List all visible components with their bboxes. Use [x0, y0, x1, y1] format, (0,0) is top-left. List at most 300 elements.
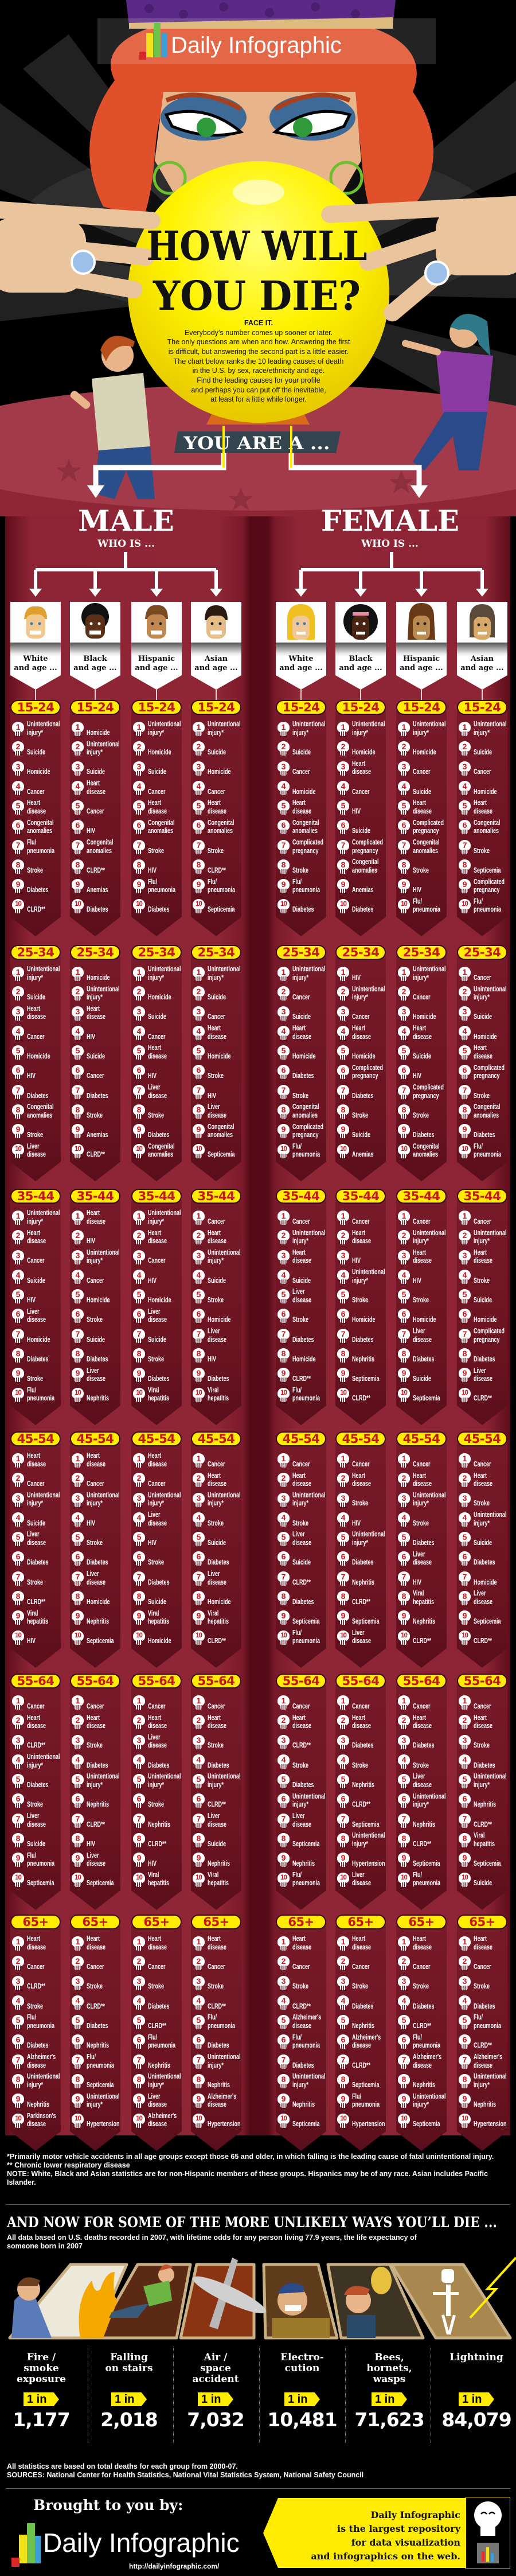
column: male asian 25-34 [191, 945, 241, 1181]
column: male hispanic 15-24: 2 [137, 742, 141, 751]
column: male white 55-64: 1 [16, 1696, 20, 1705]
column: female black 45-54: 1 [341, 1454, 345, 1463]
column: male black 25-34: 8 [76, 1105, 80, 1114]
column: male black 55-64: CLRD** [87, 1820, 105, 1828]
column: male hispanic 35-44: 5 [137, 1290, 141, 1299]
column: female white 15-24: pneumonia [292, 886, 320, 894]
column: male white 65+: 7 [16, 2055, 20, 2064]
column: female asian 55-64: Cancer [474, 1702, 491, 1710]
column: male asian 65+: Flu/ [208, 2013, 217, 2021]
card: male white [10, 602, 61, 690]
column: female hispanic 65+ [396, 1915, 447, 2151]
column: male asian 55-64: disease [208, 1820, 226, 1828]
column: female asian 25-34: 25-34 [464, 945, 501, 959]
stat: bees: 71,623 [354, 2408, 424, 2431]
column: female asian 55-64: 8 [463, 1834, 467, 1843]
column: male asian 25-34: 1 [197, 967, 201, 976]
column: male white 55-64: disease [27, 1820, 46, 1828]
column: female asian 15-24: pregnancy [474, 886, 500, 894]
column: female black 35-44: Diabetes [352, 1336, 374, 1344]
column: male white 65+: Nephritis [27, 2100, 49, 2108]
column: female asian 45-54 [457, 1431, 507, 1668]
column: male black 45-54: disease [87, 1460, 105, 1468]
column: male hispanic 25-34: Stroke [148, 1111, 164, 1119]
column: female hispanic 55-64: 8 [402, 1834, 406, 1843]
column: female asian 15-24: Unintentional [474, 720, 506, 728]
column: male hispanic 55-64: Stroke [148, 1800, 164, 1808]
column: female white 45-54: injury* [292, 1499, 308, 1507]
logo: Daily Infographic [171, 33, 342, 58]
column: male black 65+: Nephritis [87, 2041, 109, 2049]
column: male asian 45-54: Homicide [208, 1598, 231, 1606]
column: female black 45-54: Stroke [352, 1499, 368, 1507]
column: female black 35-44: 35-44 [342, 1189, 379, 1203]
column: female asian 55-64: Viral [474, 1831, 484, 1839]
column: male asian 55-64: Stroke [208, 1741, 224, 1749]
column: female white 65+: 7 [282, 2055, 286, 2064]
column: male black 65+: 8 [76, 2075, 80, 2084]
column: male black 65+: 1 [76, 1937, 80, 1946]
column: female white 25-34: Flu/ [292, 1142, 302, 1150]
column: male white 55-64: injury* [27, 1761, 43, 1769]
column: female asian 25-34: 1 [463, 967, 467, 976]
column: female hispanic 15-24: injury* [413, 729, 429, 737]
column: female asian 35-44: 2 [463, 1231, 467, 1240]
column: female hispanic 35-44: 5 [402, 1290, 406, 1299]
column: female hispanic 25-34 [396, 945, 447, 1181]
column: female hispanic 25-34: 6 [402, 1065, 406, 1075]
column: male white 35-44: HIV [27, 1296, 36, 1304]
column: female asian 35-44: 3 [463, 1251, 467, 1260]
illustration panels [0, 2255, 516, 2347]
column: female hispanic 55-64: Liver [413, 1772, 425, 1780]
column: female white 55-64 [276, 1674, 326, 1910]
column: male asian 25-34: 4 [197, 1026, 201, 1036]
column: male hispanic 45-54: Unintentional [148, 1491, 181, 1499]
column: male white 65+: Parkinson's [27, 2112, 56, 2120]
stat: stairs: 2,018 [100, 2408, 158, 2431]
column: female black 55-64: Diabetes [352, 1741, 374, 1749]
column: male black 45-54: Septicemia [87, 1637, 114, 1645]
column: male asian 25-34: injury* [208, 974, 224, 982]
column: female white 35-44: Diabetes [292, 1336, 314, 1344]
column: male hispanic 65+: injury* [148, 2081, 164, 2089]
column: female white 55-64: injury* [292, 1800, 308, 1808]
card: male hispanic: and age ... [135, 664, 178, 672]
column: male asian 35-44: Stroke [208, 1296, 224, 1304]
column: female black 15-24: 9 [341, 880, 345, 889]
column: male asian 35-44: Liver [208, 1327, 220, 1335]
column: male asian 55-64: Unintentional [208, 1772, 240, 1780]
column: male white 25-34: Unintentional [27, 965, 60, 973]
column: female black 15-24: 3 [341, 762, 345, 771]
column: female black 15-24: 1 [341, 722, 345, 731]
column: female black 45-54: Nephritis [352, 1578, 374, 1586]
column: male hispanic 15-24: 8 [137, 860, 141, 869]
column: male asian 35-44: 10 [196, 1390, 202, 1396]
column: male hispanic 65+: 65+ [143, 1915, 170, 1929]
intro text: Find the leading causes for your profile [197, 376, 320, 384]
column: female white 35-44: Suicide [292, 1277, 311, 1285]
column: female black 15-24: Diabetes [352, 905, 374, 913]
column: female asian 15-24: 3 [463, 762, 467, 771]
column: male hispanic 25-34: injury* [148, 974, 164, 982]
column: male asian 55-64: 7 [197, 1814, 201, 1823]
column: male asian 15-24: Flu/ [208, 878, 217, 886]
column: female asian 55-64: 6 [463, 1794, 467, 1803]
column: female white 35-44: 1 [282, 1211, 286, 1220]
column: female hispanic 35-44: Liver [413, 1327, 425, 1335]
column: male hispanic 55-64: 2 [137, 1715, 141, 1725]
column: female asian 65+: Stroke [474, 1982, 490, 1990]
column: male white 45-54: Unintentional [27, 1491, 60, 1499]
column: male white 55-64: Unintentional [27, 1753, 60, 1761]
column: female asian 25-34: 9 [463, 1124, 467, 1134]
column: male asian 45-54: Suicide [208, 1539, 226, 1547]
column: female asian 45-54: 2 [463, 1473, 467, 1482]
column: female white 65+: Stroke [292, 1982, 308, 1990]
column: female black 55-64: 6 [341, 1794, 345, 1803]
column: male white 45-54: 6 [16, 1552, 20, 1561]
column: male black 25-34: 9 [76, 1124, 80, 1134]
column: female black 65+: 6 [341, 2035, 345, 2044]
column: male black 15-24: 2 [76, 742, 80, 751]
column: male black 35-44: 8 [76, 1349, 80, 1358]
column: female black 65+: 1 [341, 1937, 345, 1946]
column: male asian 15-24: Septicemia [208, 905, 235, 913]
column: male asian 25-34: Liver [208, 1103, 220, 1111]
column: female black 65+: 65+ [347, 1915, 374, 1929]
column: male black 35-44: disease [87, 1375, 105, 1383]
column: male black 45-54: 3 [76, 1493, 80, 1503]
column: female hispanic 55-64: 7 [402, 1814, 406, 1823]
column: male white 45-54: Heart [27, 1452, 40, 1460]
column: male hispanic 55-64: disease [148, 1722, 167, 1730]
column: female hispanic 15-24: 6 [402, 820, 406, 830]
column: male asian 15-24: Unintentional [208, 720, 240, 728]
column: female asian 45-54: 45-54 [464, 1432, 501, 1446]
column: male hispanic 15-24: 4 [137, 781, 141, 791]
column: male asian 25-34: 9 [197, 1124, 201, 1134]
column: female white 25-34: Heart [292, 1024, 306, 1032]
column: female asian 65+: pneumonia [474, 2022, 501, 2030]
column: male white 25-34: 6 [16, 1065, 20, 1075]
column: female white 25-34: Cancer [292, 993, 310, 1001]
arrows to male/female [96, 453, 419, 488]
column: male black 35-44: 5 [76, 1290, 80, 1299]
column: female hispanic 15-24: pregnancy [413, 827, 439, 835]
intro text: The only questions are when and how. Answering the first [167, 338, 350, 346]
stat: bees: wasps [373, 2373, 405, 2385]
column: male black 25-34: 10 [75, 1146, 81, 1153]
column: female white 15-24: Homicide [292, 788, 316, 796]
icon: skull with chart [466, 2497, 510, 2569]
column: male hispanic 45-54: hepatitis [148, 1617, 169, 1625]
column: male asian 65+: Cancer [208, 1963, 225, 1971]
column: female black 35-44: 4 [341, 1270, 345, 1279]
column: female hispanic 15-24: 1 [402, 722, 406, 731]
column: male black 25-34: Diabetes [87, 1092, 108, 1100]
column: female black 65+: 8 [341, 2075, 345, 2084]
column: female white 15-24: 9 [282, 880, 286, 889]
column: male asian 65+: 8 [197, 2075, 201, 2084]
column: male hispanic 25-34: 8 [137, 1105, 141, 1114]
column: male white 55-64: CLRD** [27, 1741, 45, 1749]
connectors from cards to pills [35, 688, 36, 701]
column: female hispanic 45-54: hepatitis [413, 1598, 434, 1606]
column: female white 45-54: Heart [292, 1472, 306, 1480]
column: male asian 45-54: 10 [196, 1632, 202, 1639]
column: male asian 55-64: 2 [197, 1715, 201, 1725]
column: female asian 25-34: Diabetes [474, 1131, 495, 1139]
column: male asian 25-34: 2 [197, 987, 201, 996]
column: male hispanic 45-54: Liver [148, 1511, 161, 1519]
column: male asian 35-44: 8 [197, 1349, 201, 1358]
column: female black 65+: 3 [341, 1976, 345, 1986]
column: female hispanic 45-54: Cancer [413, 1460, 431, 1468]
column: female asian 45-54: CLRD** [474, 1637, 492, 1645]
column: female black 35-44: 9 [341, 1368, 345, 1378]
column: male asian 55-64: Cancer [208, 1702, 225, 1710]
column: male white 65+: Stroke [27, 2002, 43, 2010]
column: female white 55-64: 3 [282, 1736, 286, 1745]
column: male white 25-34: anomalies [27, 1111, 52, 1119]
column: female asian 25-34: 3 [463, 1007, 467, 1016]
column: male black 15-24: 15-24 [77, 701, 114, 714]
column: female hispanic 25-34: Diabetes [413, 1131, 435, 1139]
column: female asian 15-24: 2 [463, 742, 467, 751]
stat: lightning: 1 in [462, 2393, 482, 2406]
column: female black 15-24: anomalies [352, 866, 377, 874]
column: female black 65+: 7 [341, 2055, 345, 2064]
column: female black 25-34: Homicide [352, 1052, 376, 1060]
column: female asian 15-24: 15-24 [464, 701, 501, 714]
column: female asian 35-44 [457, 1189, 507, 1425]
column: male hispanic 65+: 2 [137, 1956, 141, 1966]
column: male white 45-54: disease [27, 1460, 46, 1468]
column: female asian 45-54: Heart [474, 1472, 487, 1480]
column: male white 65+: pneumonia [27, 2022, 54, 2030]
male character [69, 336, 155, 499]
column: male white 25-34: Homicide [27, 1052, 50, 1060]
column: female hispanic 25-34: Heart [413, 1024, 426, 1032]
column: female asian 25-34: pregnancy [474, 1072, 500, 1080]
column: female hispanic 45-54: 10 [401, 1632, 407, 1639]
column: male asian 45-54: 8 [197, 1591, 201, 1601]
column: male asian 15-24: injury* [208, 729, 224, 737]
column: male black 65+: 10 [75, 2115, 81, 2122]
column: female asian 55-64: disease [474, 1722, 492, 1730]
column: female white 45-54: Diabetes [292, 1598, 314, 1606]
column: male hispanic 15-24: 5 [137, 801, 141, 810]
column: male black 35-44: 2 [76, 1231, 80, 1240]
column: female white 65+: 9 [282, 2094, 286, 2103]
column: female white 15-24: disease [292, 807, 311, 815]
column: male black 55-64 [70, 1674, 120, 1910]
column: female hispanic 35-44: 35-44 [403, 1189, 440, 1203]
stat: bees: 1 in [375, 2393, 394, 2406]
subtext: All data based on U.S. deaths recorded in 2007, with lifetime odds for any person living 77.9 years, the life expectancy of someone born in 2007 [7, 2233, 417, 2250]
column: female asian 55-64: Diabetes [474, 1761, 495, 1769]
column: male hispanic 55-64: disease [148, 1741, 167, 1749]
column: male black 45-54: 2 [76, 1473, 80, 1482]
column: male black 15-24: Cancer [87, 807, 104, 815]
column: female hispanic 45-54: injury* [413, 1499, 429, 1507]
column: male hispanic 45-54: 3 [137, 1493, 141, 1503]
column: male hispanic 55-64: 7 [137, 1814, 141, 1823]
column: male hispanic 25-34: Homicide [148, 993, 171, 1001]
card: female asian: and age ... [460, 664, 504, 672]
column: female black 35-44: 6 [341, 1309, 345, 1318]
column: male black 25-34: 2 [76, 987, 80, 996]
column: female black 65+ [335, 1915, 386, 2151]
column: male black 35-44: Cancer [87, 1277, 104, 1285]
column: male asian 55-64: Diabetes [208, 1761, 229, 1769]
column: male hispanic 15-24: Congenital [148, 819, 175, 827]
column: male hispanic 55-64: hepatitis [148, 1879, 169, 1887]
column: male black 55-64: 10 [75, 1874, 81, 1881]
column: female hispanic 45-54 [396, 1431, 447, 1668]
intro text: at least for a little while longer. [210, 395, 307, 403]
column: female white 25-34: disease [292, 1033, 311, 1041]
column: female black 55-64: 5 [341, 1775, 345, 1784]
card: female hispanic: Hispanic [403, 655, 440, 663]
card: male hispanic: Hispanic [138, 655, 175, 663]
column: female asian 35-44: Complicated [474, 1327, 505, 1335]
column: female black 25-34: Stroke [352, 1111, 368, 1119]
column: female black 25-34: injury* [352, 993, 368, 1001]
column: male hispanic 15-24: disease [148, 807, 167, 815]
column: female hispanic 25-34: Cancer [413, 993, 431, 1001]
column: male asian 65+: 7 [197, 2055, 201, 2064]
column: male asian 55-64: Heart [208, 1714, 221, 1722]
column: male asian 55-64: 5 [197, 1775, 201, 1784]
column: male white 35-44: Heart [27, 1229, 40, 1237]
column: female black 15-24: 6 [341, 820, 345, 830]
column: male hispanic 65+: disease [148, 1943, 167, 1951]
column: female black 55-64: Nephritis [352, 1781, 374, 1789]
column: female black 45-54: Liver [352, 1629, 365, 1637]
column: female hispanic 35-44: Diabetes [413, 1355, 435, 1363]
column: female hispanic 35-44: 8 [402, 1349, 406, 1358]
column: male hispanic 55-64 [131, 1674, 182, 1910]
column: female black 25-34: 1 [341, 967, 345, 976]
column: female asian 15-24: Flu/ [474, 897, 483, 905]
column: female hispanic 25-34: pregnancy [413, 1092, 439, 1100]
column: male hispanic 25-34: 5 [137, 1046, 141, 1055]
card: female asian: Asian [471, 655, 494, 663]
column: male white 35-44: pneumonia [27, 1394, 54, 1402]
column: female hispanic 25-34: 1 [402, 967, 406, 976]
column: male white 55-64: 6 [16, 1794, 20, 1803]
column: female black 55-64: Unintentional [352, 1831, 385, 1839]
column: male hispanic 25-34: anomalies [148, 1150, 173, 1158]
column: female black 65+: 2 [341, 1956, 345, 1966]
column: male black 55-64: 4 [76, 1755, 80, 1764]
column: female white 55-64: Unintentional [292, 1792, 325, 1800]
column: male white 35-44: Liver [27, 1308, 40, 1316]
column: female black 55-64: disease [352, 1879, 371, 1887]
column: male hispanic 65+: Unintentional [148, 2072, 181, 2080]
column: female black 25-34: 4 [341, 1026, 345, 1036]
column: female black 65+: disease [352, 2041, 371, 2049]
column: male asian 65+: injury* [208, 2061, 224, 2069]
column: female hispanic 15-24: 5 [402, 801, 406, 810]
stat: bees: Bees, [374, 2352, 404, 2363]
column: male asian 25-34: 25-34 [198, 945, 234, 959]
column: female black 35-44: Septicemia [352, 1375, 380, 1383]
column: female black 45-54: 5 [341, 1532, 345, 1542]
column: male white 65+: injury* [27, 2081, 43, 2089]
sources: All statistics are based on total deaths for each group from 2000-07. [7, 2462, 238, 2470]
column: female hispanic 15-24: HIV [413, 886, 421, 894]
column: male asian 15-24: 7 [197, 840, 201, 850]
column: male black 45-54: Nephritis [87, 1617, 109, 1625]
column: female black 55-64: disease [352, 1722, 371, 1730]
column: male asian 65+: disease [208, 2100, 226, 2108]
column: male asian 45-54: hepatitis [208, 1617, 229, 1625]
column: female white 25-34: Complicated [292, 1123, 323, 1131]
column: male white 65+ [10, 1915, 61, 2151]
column: male white 25-34: HIV [27, 1072, 36, 1080]
column: male hispanic 25-34: disease [148, 1092, 167, 1100]
column: female asian 65+: injury* [474, 2081, 490, 2089]
column: male black 65+: CLRD** [87, 2002, 105, 2010]
column: male hispanic 55-64: 3 [137, 1736, 141, 1745]
column: female black 15-24: 7 [341, 840, 345, 850]
column: male white 65+: Heart [27, 1935, 40, 1943]
column: male black 25-34: Unintentional [87, 985, 119, 993]
column: female white 15-24: 10 [280, 901, 287, 908]
column: female hispanic 35-44: 1 [402, 1211, 406, 1220]
column: female hispanic 15-24: 7 [402, 840, 406, 850]
column: female white 45-54: Flu/ [292, 1629, 302, 1637]
column: male hispanic 45-54: 1 [137, 1454, 141, 1463]
column: male white 35-44: 4 [16, 1270, 20, 1279]
column: female asian 55-64: Unintentional [474, 1772, 506, 1780]
column: female asian 45-54: Septicemia [474, 1617, 501, 1625]
column: female hispanic 15-24: 15-24 [403, 701, 440, 714]
column: female white 15-24: Stroke [292, 866, 308, 874]
footer logo: Daily Infographic [43, 2528, 240, 2558]
column: female black 15-24: injury* [352, 729, 368, 737]
column: male black 45-54: 7 [76, 1572, 80, 1581]
section: ages 55-64 [10, 1674, 507, 1910]
column: male asian 55-64: 3 [197, 1736, 201, 1745]
column: female black 15-24: HIV [352, 807, 361, 815]
column: female black 55-64: 2 [341, 1715, 345, 1725]
column: male black 25-34: Homicide [87, 974, 110, 982]
column: female white 25-34: Diabetes [292, 1072, 314, 1080]
column: female black 15-24: Unintentional [352, 720, 385, 728]
column: male asian 15-24: 1 [197, 722, 201, 731]
column: male black 15-24: Heart [87, 779, 100, 787]
column: male black 35-44: Homicide [87, 1296, 110, 1304]
card: male asian: and age ... [194, 664, 238, 672]
column: female asian 35-44: pregnancy [474, 1336, 500, 1344]
column: female white 15-24: 5 [282, 801, 286, 810]
column: female white 35-44 [276, 1189, 326, 1425]
column: female white 35-44: CLRD** [292, 1375, 311, 1383]
column: male white 65+: 9 [16, 2094, 20, 2103]
column: male hispanic 45-54: 4 [137, 1513, 141, 1522]
column: male black 65+: Hypertension [87, 2120, 120, 2128]
column: female white 65+: 1 [282, 1937, 286, 1946]
column: male hispanic 55-64: Diabetes [148, 1761, 170, 1769]
column: female hispanic 55-64: Flu/ [413, 1871, 422, 1879]
column: female asian 65+: Diabetes [474, 2002, 495, 2010]
column: male black 35-44: injury* [87, 1256, 103, 1264]
